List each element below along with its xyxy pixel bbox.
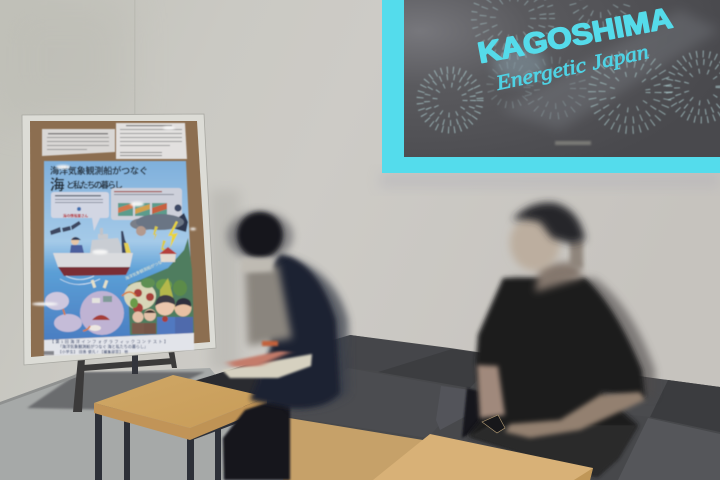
glare highlights	[32, 126, 196, 306]
fireworks	[420, 0, 720, 130]
coat ghost	[270, 256, 349, 408]
chest grey	[245, 264, 292, 346]
head ghost	[227, 211, 293, 261]
lower flow circles	[45, 291, 136, 335]
scientist character	[170, 204, 188, 232]
legs	[223, 395, 290, 480]
notice right	[116, 123, 187, 159]
credit strip	[44, 333, 194, 356]
mat: right middle	[622, 378, 668, 417]
dress ghost	[510, 278, 655, 400]
credit strip: 「海洋気象観測船がつなぐ 海と私たちの暮らし」	[58, 343, 148, 349]
crops tomatoes and leaves	[124, 278, 187, 313]
child in blue	[155, 295, 177, 334]
island with houses	[124, 238, 194, 335]
hull lower	[58, 267, 130, 276]
phone	[482, 415, 505, 433]
person on deck	[70, 237, 84, 253]
reflection on water	[555, 141, 591, 145]
storm cloud and rain	[130, 214, 184, 256]
platform mats	[186, 335, 720, 480]
main lilac circle	[80, 291, 124, 335]
hull	[53, 253, 133, 267]
child small left	[132, 309, 156, 334]
table edge	[574, 468, 593, 480]
table top	[373, 434, 593, 480]
poster board	[22, 114, 216, 365]
ponytail side	[570, 240, 583, 268]
research vessel	[53, 228, 133, 276]
satellites	[50, 221, 81, 235]
island with houses: 海洋気象観測船がつなぐ	[124, 257, 166, 281]
hand	[228, 351, 290, 367]
Energetic Japan subtitle: Energetic Japan	[493, 39, 651, 95]
mat: right front	[618, 418, 720, 480]
right arm	[505, 392, 645, 438]
mat: right back	[650, 380, 720, 432]
head	[237, 212, 283, 258]
poster background	[44, 161, 194, 340]
fireworks glow	[494, 47, 546, 83]
notice left	[42, 129, 115, 156]
dress	[467, 278, 645, 477]
infographic poster	[44, 161, 194, 356]
child on right	[174, 298, 193, 334]
stool front left side	[94, 403, 190, 440]
coat	[250, 254, 340, 408]
orange flow arrows	[63, 292, 136, 331]
skirt	[470, 425, 637, 476]
hair	[512, 203, 585, 244]
book	[222, 354, 312, 378]
right table	[373, 434, 593, 480]
neck	[535, 262, 582, 292]
bag	[462, 388, 484, 438]
projected screen	[382, 0, 720, 173]
stool legs	[95, 408, 267, 480]
floor	[0, 368, 300, 480]
temperature map panels	[118, 203, 167, 216]
left arm	[477, 365, 505, 418]
left person blurred	[222, 211, 349, 480]
sea and sonar	[60, 276, 108, 288]
board frame	[22, 114, 216, 365]
stool front right side	[190, 397, 267, 440]
credit strip: 【第1回海洋インフォグラフィックコンテスト】	[50, 338, 168, 344]
credit strip: 【小学生】 田島 優凡 / 【編集部賞】 他	[58, 349, 128, 354]
right person blurred	[462, 203, 655, 477]
poster title line 1: 海洋気象観測船がつなぐ	[50, 165, 148, 176]
orange detail	[262, 341, 278, 346]
cork backing	[30, 121, 210, 357]
speech bubble left	[51, 192, 109, 231]
face mask	[241, 258, 273, 272]
wall shading	[0, 0, 720, 380]
screen image area	[404, 0, 720, 157]
speech bubble left: 海の情報屋さん	[63, 213, 89, 218]
stool top	[94, 375, 267, 428]
poster title line 2: 海	[50, 177, 65, 194]
face	[510, 215, 560, 271]
wood bench base	[283, 417, 423, 480]
small circle bottom	[54, 314, 82, 332]
superstructure	[90, 238, 124, 253]
poster title line 2	[50, 177, 123, 194]
screen cyan frame	[382, 0, 720, 173]
light beam	[500, 10, 720, 130]
mat: centre	[283, 368, 470, 438]
poster title line 2: と私たちの暮らし	[66, 180, 123, 190]
KAGOSHIMA title: KAGOSHIMA	[475, 3, 675, 70]
small circle top	[45, 292, 69, 310]
mat: back	[345, 335, 450, 372]
speech bubble right	[111, 188, 182, 220]
easel stand	[73, 350, 177, 412]
children characters	[132, 295, 193, 334]
left stool	[94, 375, 267, 480]
